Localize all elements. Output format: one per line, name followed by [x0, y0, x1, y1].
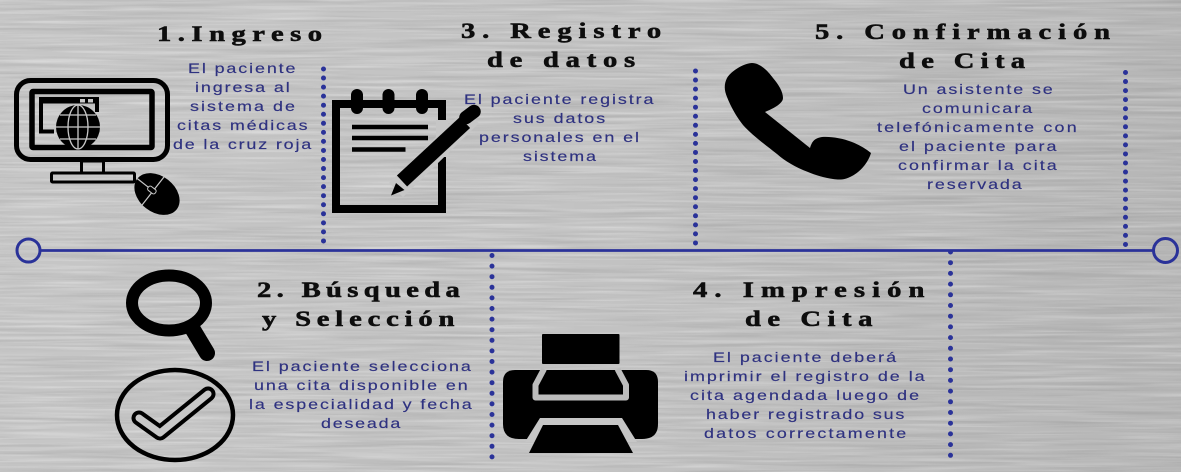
panel: step 4 Impresión de Cita: [503, 277, 925, 453]
text: step 1 description: ingresa al: [195, 80, 290, 95]
text: step 5 description: [877, 82, 1077, 192]
heading: step 2: [257, 277, 460, 331]
text: step 5 description: reservada: [927, 177, 1022, 192]
heading: step 4: [693, 277, 924, 331]
icon: computer with globe and mouse: [16, 80, 188, 224]
text: step 5 description: telefónicamente con: [877, 120, 1077, 135]
heading: step 5: [815, 19, 1110, 73]
text: step 1 description: sistema de: [190, 99, 295, 114]
text: step 1 description: de la cruz roja: [173, 137, 311, 152]
text: step 5 description: confirmar la cita: [898, 158, 1057, 173]
heading: step 2: 2. Búsqueda: [257, 277, 460, 302]
heading: step 1: 1.Ingreso: [157, 21, 322, 46]
text: step 5 description: el paciente para: [899, 139, 1057, 154]
text: step 3 description: El paciente registra: [464, 92, 654, 107]
panel: step 2 Búsqueda y Selección: [117, 276, 472, 460]
text: step 1 description: El paciente: [188, 61, 296, 76]
heading: step 3: de datos: [487, 47, 635, 72]
text: step 4 description: [684, 350, 925, 441]
text: step 2 description: El paciente selecciona: [252, 359, 471, 374]
text: step 4 description: imprimir el registro de la: [684, 369, 925, 384]
heading: step 3: [461, 18, 661, 72]
text: step 3 description: personales en el: [479, 130, 639, 145]
text: step 3 description: [464, 92, 654, 164]
icon: magnifying glass: [132, 276, 207, 353]
text: step 5 description: Un asistente se: [903, 82, 1053, 97]
icon: printer: [503, 334, 658, 453]
panel: step 5 Confirmación de Cita: [725, 19, 1110, 192]
heading: step 5: 5. Confirmación: [815, 19, 1110, 44]
panel: step 1 Ingreso: [16, 21, 322, 224]
panel: step 3 Registro de datos: [336, 18, 661, 209]
text: step 1 description: [173, 61, 311, 152]
text: step 3 description: sus datos: [513, 111, 605, 126]
text: step 4 description: cita agendada luego de: [690, 388, 919, 403]
text: step 5 description: comunicara: [922, 101, 1032, 116]
icon: telephone handset: [725, 63, 871, 180]
text: step 4 description: datos correctamente: [704, 426, 906, 441]
icon: check mark in circle: [117, 370, 233, 460]
text: step 2 description: [249, 359, 472, 431]
text: step 4 description: haber registrado sus: [706, 407, 904, 422]
heading: step 4: de Cita: [745, 306, 873, 331]
heading: step 5: de Cita: [899, 48, 1025, 73]
dotted dividers: [324, 69, 1126, 458]
text: step 2 description: una cita disponible en: [254, 378, 468, 393]
heading: step 3: 3. Registro: [461, 18, 661, 43]
text: step 2 description: deseada: [321, 416, 400, 431]
heading: step 4: 4. Impresión: [693, 277, 924, 302]
timeline: horizontal axis with end circles: [17, 238, 1178, 262]
icon: notepad and pencil: [336, 95, 474, 209]
text: step 3 description: sistema: [523, 149, 596, 164]
text: step 4 description: El paciente deberá: [713, 350, 896, 365]
heading: step 2: y Selección: [262, 306, 454, 331]
text: step 1 description: citas médicas: [177, 118, 308, 133]
text: step 2 description: la especialidad y fecha: [249, 397, 472, 412]
